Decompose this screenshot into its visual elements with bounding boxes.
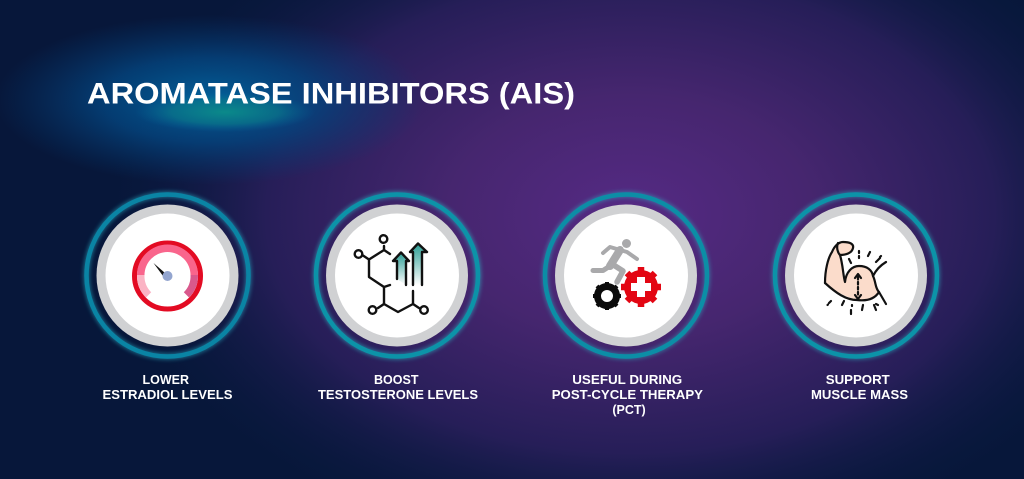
icon ring: support muscle mass xyxy=(775,194,937,356)
icon ring: post-cycle therapy xyxy=(545,194,707,356)
icon: flexed arm xyxy=(825,242,886,314)
label: lower estradiol levels: LOWER xyxy=(142,373,189,387)
label: boost testosterone levels: BOOST xyxy=(374,373,419,387)
label: useful during post-cycle therapy: (PCT) xyxy=(612,403,646,417)
icon ring: lower estradiol xyxy=(86,194,248,356)
icon: runner on gears xyxy=(593,239,661,310)
label: support muscle mass: SUPPORT xyxy=(826,373,890,387)
icon ring: boost testosterone xyxy=(316,194,478,356)
label: useful during post-cycle therapy: USEFUL DURING xyxy=(572,373,682,387)
icon: molecule with rising arrows xyxy=(355,235,428,314)
title: AROMATASE INHIBITORS (AIS) xyxy=(87,78,575,110)
panel: boost testosterone levels xyxy=(316,194,478,402)
panel: lower estradiol levels xyxy=(86,194,248,402)
panel: useful during post-cycle therapy xyxy=(545,194,707,417)
icon: gauge xyxy=(134,243,200,309)
small black gear xyxy=(593,282,621,310)
label: lower estradiol levels: ESTRADIOL LEVELS xyxy=(102,388,232,402)
label: support muscle mass: MUSCLE MASS xyxy=(811,388,908,402)
panel: support muscle mass xyxy=(775,194,937,402)
label: useful during post-cycle therapy: POST-CYCLE THERAPY xyxy=(552,388,704,402)
red gear with cross xyxy=(621,267,661,307)
runner xyxy=(593,239,637,282)
label: boost testosterone levels: TESTOSTERONE LEVELS xyxy=(318,388,478,402)
